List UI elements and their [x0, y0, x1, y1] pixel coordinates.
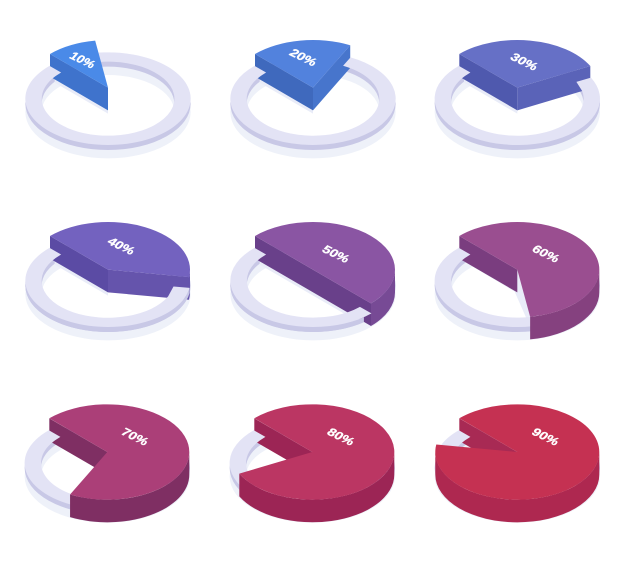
slice outer wall — [70, 452, 189, 522]
slice cut walls — [459, 54, 590, 110]
wall shadow band — [55, 79, 108, 114]
slice cut wall — [459, 418, 517, 475]
chart: 30% — [435, 40, 600, 158]
wall shadow band — [464, 261, 531, 320]
ring shadow — [230, 66, 396, 158]
ring side — [230, 422, 395, 514]
ring shadow — [25, 66, 191, 158]
chart: 10% — [25, 41, 191, 158]
slice cut wall — [459, 236, 517, 292]
slice top — [239, 404, 394, 500]
ring side — [230, 239, 396, 332]
slice cut wall — [254, 418, 312, 475]
chart: 80% — [230, 404, 395, 523]
ring shadow — [230, 248, 396, 340]
slice top — [459, 222, 599, 317]
wall shadow band — [55, 261, 108, 296]
slice outer wall — [530, 270, 599, 339]
ring side — [25, 422, 190, 514]
ring side — [435, 57, 600, 150]
slice top — [50, 222, 190, 277]
ring surface — [230, 430, 265, 493]
chart: 60% — [435, 222, 600, 340]
ring shadow — [25, 430, 190, 523]
wall shadow band — [260, 261, 360, 323]
ring side — [435, 239, 600, 332]
ring shadow — [230, 430, 395, 523]
ring front side — [25, 281, 190, 332]
ring surface — [25, 430, 90, 508]
label: 50% — [319, 243, 353, 266]
label: 70% — [118, 425, 152, 448]
ring surface — [230, 57, 396, 145]
ring surface — [440, 430, 470, 450]
ring side — [435, 422, 600, 514]
label: 10% — [67, 49, 99, 71]
slice top — [50, 41, 108, 88]
ring side — [230, 57, 396, 150]
ring shadow — [435, 248, 600, 340]
slice cut wall — [49, 418, 107, 475]
ring surface — [25, 52, 191, 145]
label: 90% — [529, 425, 563, 448]
ring side — [25, 57, 191, 150]
chart: 70% — [25, 404, 190, 523]
chart: 50% — [230, 222, 396, 340]
label: 30% — [507, 50, 542, 73]
wall shadow band — [260, 79, 313, 114]
chart: 40% — [25, 222, 191, 340]
slice outer wall — [435, 452, 599, 522]
label: 60% — [529, 242, 563, 265]
ring shadow — [435, 430, 600, 523]
chart: 20% — [230, 40, 396, 158]
ring surface — [435, 248, 546, 327]
slice top — [255, 222, 395, 303]
ring surface — [230, 248, 371, 327]
label: 80% — [324, 425, 358, 448]
slice top — [435, 404, 599, 500]
ring side — [25, 239, 191, 332]
slice top — [255, 40, 350, 88]
slice cut wall — [50, 54, 108, 110]
slice walls — [50, 236, 190, 300]
slice walls — [255, 236, 395, 326]
label: 20% — [286, 46, 321, 69]
ring surface — [435, 66, 600, 145]
label: 40% — [104, 235, 139, 258]
ring shadow — [435, 66, 600, 158]
ring shadow — [25, 248, 191, 340]
ring front side — [230, 281, 364, 332]
chart: 90% — [435, 404, 600, 523]
slice top — [459, 40, 590, 88]
slice cut walls — [255, 45, 350, 110]
wall shadow band — [464, 79, 517, 114]
slice outer wall — [239, 452, 394, 522]
ring surface — [25, 248, 190, 327]
slice top — [49, 404, 189, 500]
